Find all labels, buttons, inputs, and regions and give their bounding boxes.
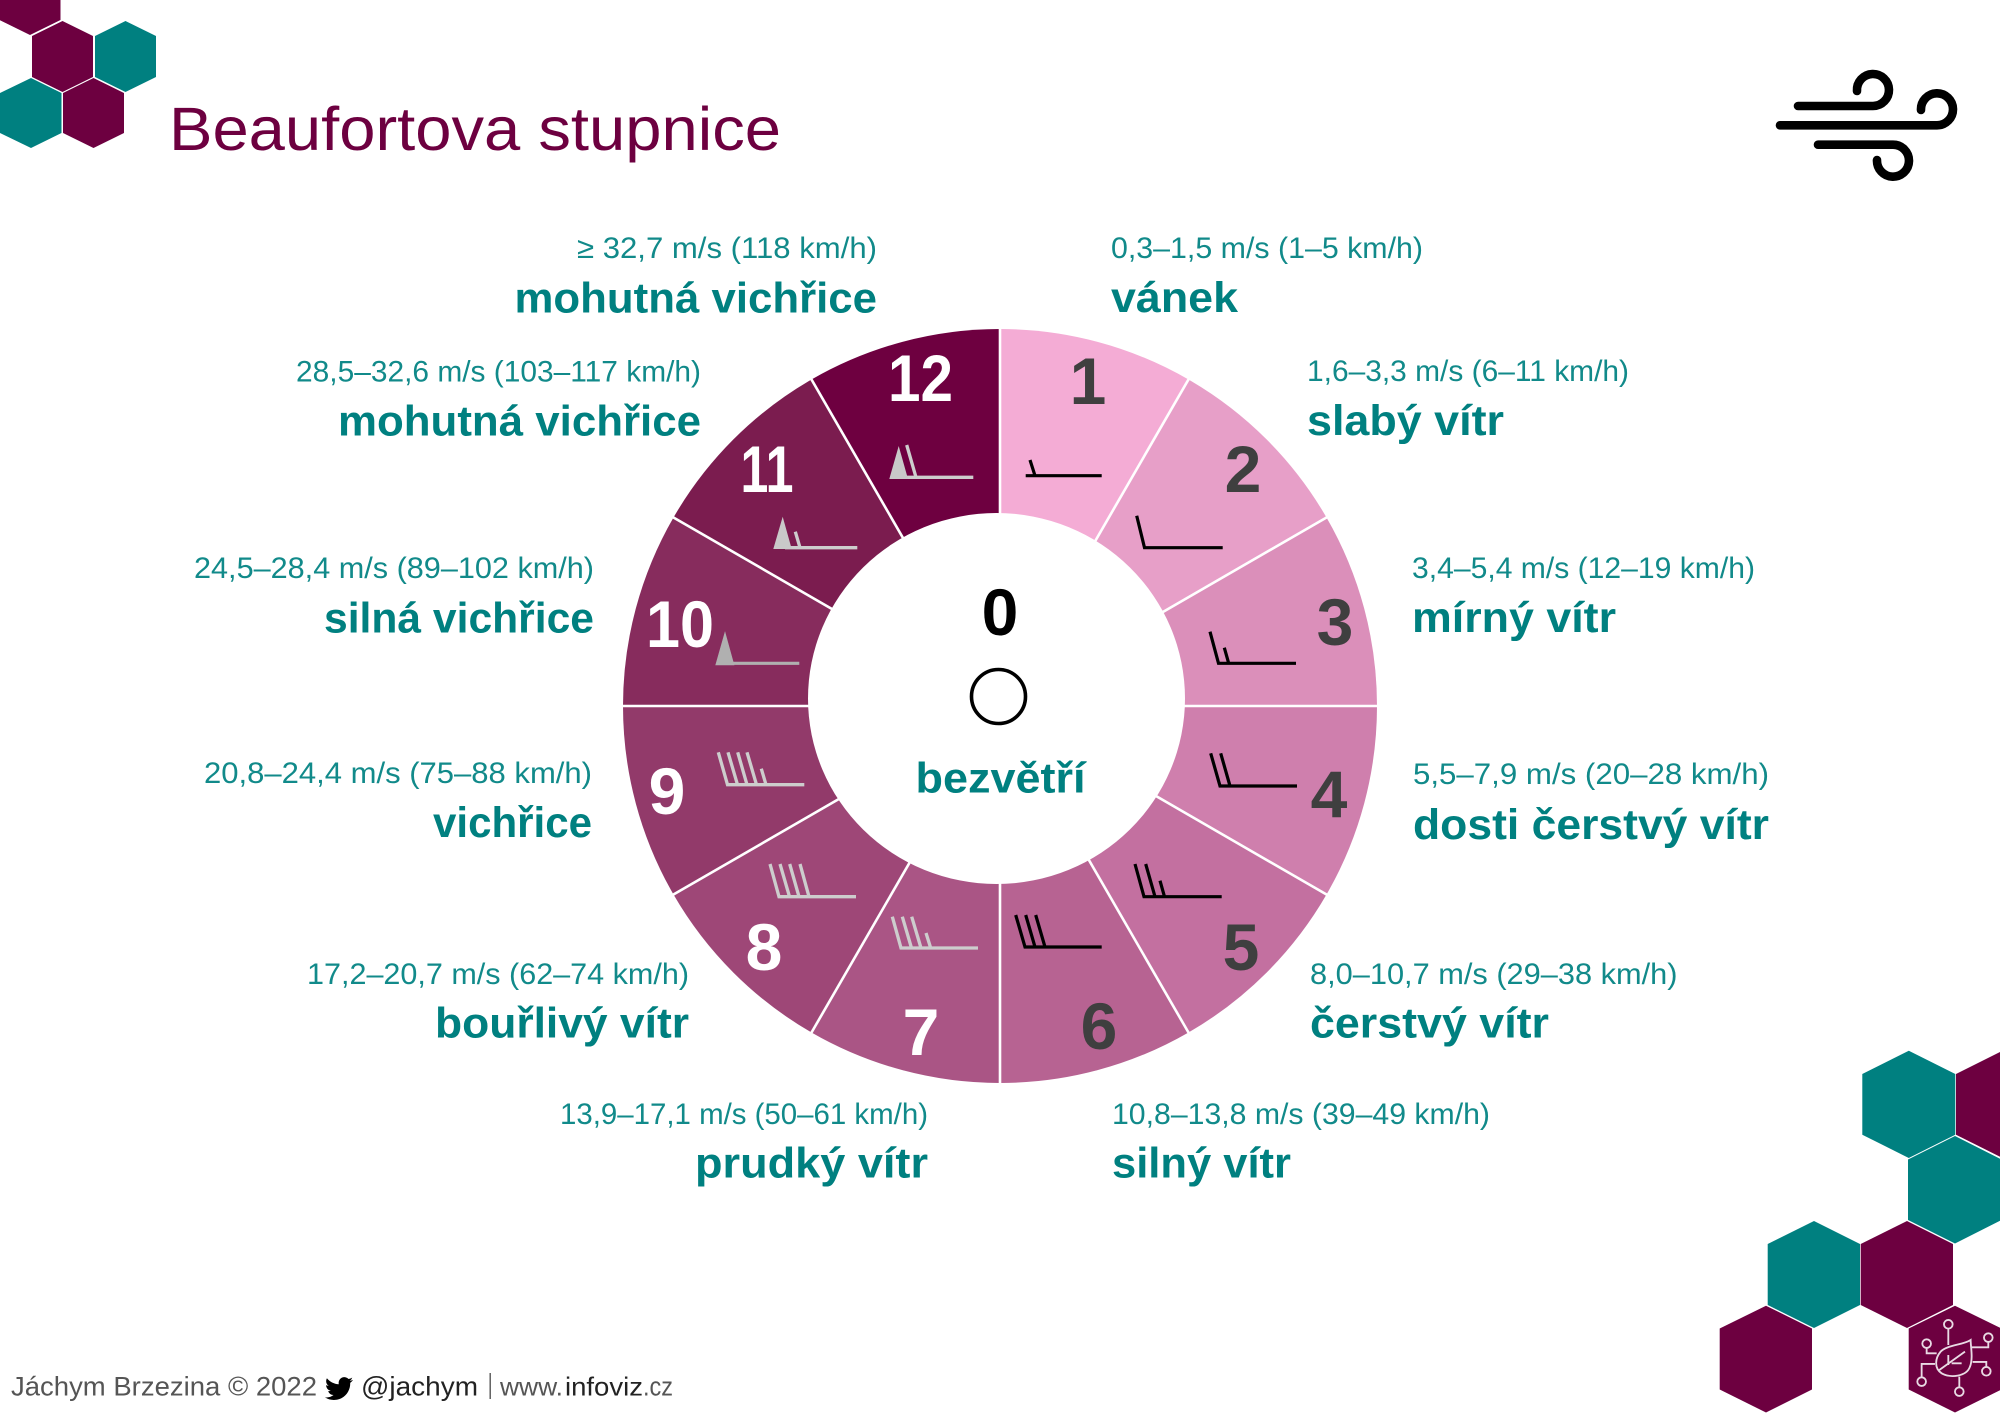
label: level 4: 5,5–7,9 m/s (20–28 km/h) bbox=[1413, 758, 1769, 791]
label: level 8: 17,2–20,7 m/s (62–74 km/h) bbox=[307, 958, 689, 991]
label: level 12: ≥ 32,7 m/s (118 km/h) bbox=[577, 232, 877, 265]
icon: twitter bird bbox=[325, 1377, 353, 1400]
label: level 1: vánek bbox=[1111, 274, 1238, 322]
sector 7: 7 bbox=[903, 995, 939, 1069]
sector 8: 8 bbox=[746, 910, 782, 984]
center: level 0 calm: bezvětří bbox=[916, 755, 1088, 803]
hexagon cluster top left bbox=[0, 0, 156, 148]
label: level 4: dosti čerstvý vítr bbox=[1413, 801, 1769, 849]
label: level 10 bbox=[194, 552, 594, 643]
sector 1 bbox=[1000, 329, 1188, 706]
sector 8 bbox=[674, 706, 1000, 1032]
sector 6 bbox=[1000, 706, 1188, 1083]
label: level 6: silný vítr bbox=[1112, 1140, 1291, 1188]
label: level 6 bbox=[1112, 1098, 1490, 1188]
wheel of Beaufort sectors bbox=[619, 325, 1381, 1087]
footer credit: www. bbox=[499, 1372, 563, 1402]
icon: wind bbox=[1780, 74, 1953, 177]
label: level 2: slabý vítr bbox=[1307, 397, 1504, 445]
sector 11: 11 bbox=[740, 432, 794, 506]
sector 7 bbox=[812, 706, 1000, 1083]
label: level 7: prudký vítr bbox=[695, 1140, 928, 1188]
label: level 5 bbox=[1310, 958, 1678, 1048]
center: level 0 calm bbox=[808, 513, 1185, 884]
sector 12 bbox=[812, 329, 1000, 706]
footer credit: infoviz bbox=[565, 1372, 643, 1402]
label: level 2: 1,6–3,3 m/s (6–11 km/h) bbox=[1307, 355, 1629, 388]
sector 6: 6 bbox=[1081, 989, 1117, 1063]
label: level 2 bbox=[1307, 355, 1629, 445]
sector 12: 12 bbox=[888, 341, 953, 415]
center: level 0 calm: 0 bbox=[982, 575, 1018, 649]
sector 2: 2 bbox=[1225, 432, 1261, 506]
label: level 3: 3,4–5,4 m/s (12–19 km/h) bbox=[1412, 552, 1755, 585]
label: level 8: bouřlivý vítr bbox=[435, 1000, 689, 1048]
label: level 5: čerstvý vítr bbox=[1310, 1000, 1549, 1048]
label: level 9 bbox=[204, 757, 592, 847]
sector 9 bbox=[623, 706, 1000, 894]
sector 4: 4 bbox=[1311, 757, 1348, 831]
sector 11 bbox=[674, 380, 1000, 706]
label: level 3: mírný vítr bbox=[1412, 594, 1616, 642]
label: level 6: 10,8–13,8 m/s (39–49 km/h) bbox=[1112, 1098, 1490, 1131]
sector 1: 1 bbox=[1070, 344, 1106, 418]
label: level 9: 20,8–24,4 m/s (75–88 km/h) bbox=[204, 757, 592, 790]
label: level 7: 13,9–17,1 m/s (50–61 km/h) bbox=[560, 1098, 928, 1131]
hexagon cluster bottom right bbox=[1720, 1051, 2000, 1412]
label: level 5: 8,0–10,7 m/s (29–38 km/h) bbox=[1310, 958, 1678, 991]
label: level 1: 0,3–1,5 m/s (1–5 km/h) bbox=[1111, 232, 1423, 265]
footer credit: .cz bbox=[643, 1372, 673, 1402]
sector 4 bbox=[1000, 706, 1377, 894]
icon: leaf network bbox=[1917, 1320, 1993, 1396]
label: level 1 bbox=[1111, 232, 1423, 322]
label: level 11: mohutná vichřice bbox=[338, 398, 701, 446]
sector 5: 5 bbox=[1223, 910, 1259, 984]
label: level 3 bbox=[1412, 552, 1755, 642]
sector 3 bbox=[1000, 518, 1377, 706]
label: level 8 bbox=[307, 958, 689, 1048]
sector 10: 10 bbox=[646, 587, 714, 661]
footer credit: @jachym bbox=[361, 1372, 478, 1402]
label: level 9: vichřice bbox=[433, 799, 592, 847]
sector 5 bbox=[1000, 706, 1326, 1032]
sector 3: 3 bbox=[1317, 585, 1353, 659]
label: level 11 bbox=[296, 356, 701, 446]
label: level 11: 28,5–32,6 m/s (103–117 km/h) bbox=[296, 356, 701, 389]
label: level 10: silná vichřice bbox=[324, 595, 594, 643]
label: level 10: 24,5–28,4 m/s (89–102 km/h) bbox=[194, 552, 594, 585]
label: level 12: mohutná vichřice bbox=[514, 274, 877, 322]
sector 10 bbox=[623, 518, 1000, 706]
label: level 4 bbox=[1413, 758, 1769, 849]
label: level 7 bbox=[560, 1098, 928, 1188]
label: level 12 bbox=[514, 232, 877, 322]
title: Beaufortova stupnice bbox=[169, 95, 781, 163]
footer credit bbox=[11, 1372, 673, 1402]
sector 9: 9 bbox=[649, 754, 685, 828]
sector 2 bbox=[1000, 380, 1326, 706]
footer credit: Jáchym Brzezina © 2022 bbox=[11, 1372, 317, 1402]
